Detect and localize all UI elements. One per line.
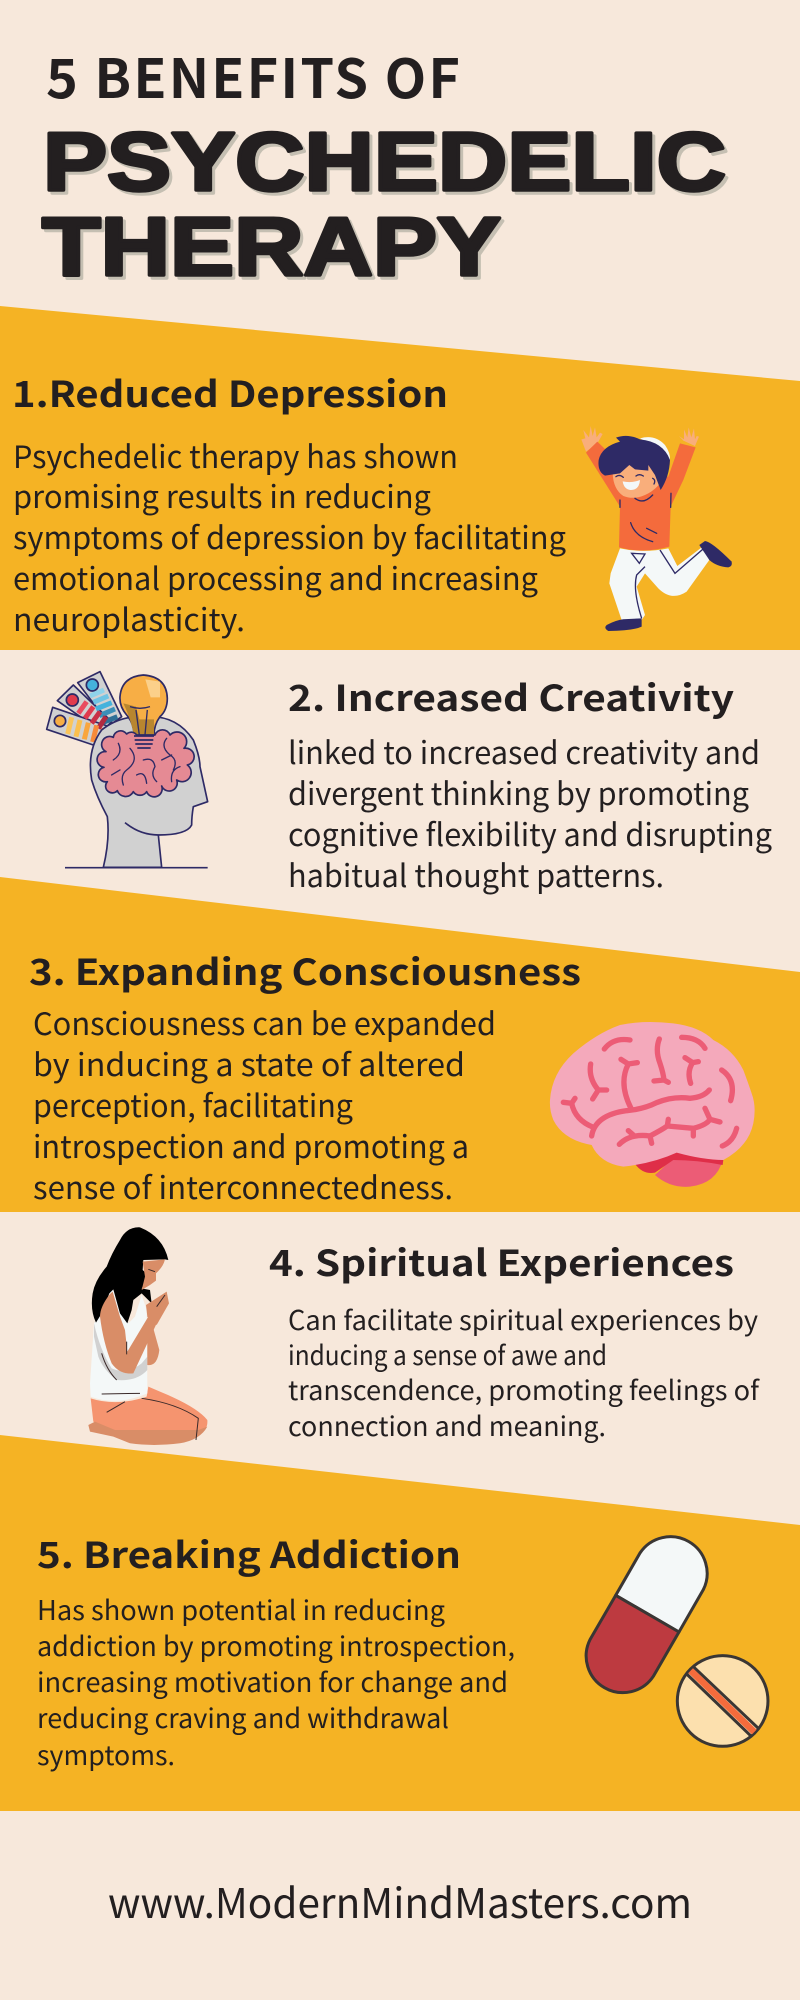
body text: expanding consciousness: Consciousness can be expanded [33,999,496,1044]
heading: increased creativity: 2. Increased Creativity [288,670,734,722]
body text: expanding consciousness [33,999,496,1208]
body text: spiritual experiences: transcendence, promoting feelings of [288,1369,760,1408]
body text: reduced depression: Psychedelic therapy has shown [13,432,458,477]
body text: increased creativity: habitual thought patterns. [288,851,664,896]
panel: expanding consciousness [0,877,800,1212]
body text: expanding consciousness: perception, facilitating [33,1081,354,1126]
body text: spiritual experiences: connection and meaning. [288,1405,606,1444]
panel: increased creativity [47,670,772,896]
title word: psychedelic: PSYCHEDELIC [43,115,726,208]
title word: therapy: THERAPY [45,203,504,296]
body text: increased creativity: linked to increased creativity and [288,728,760,773]
body text: increased creativity: cognitive flexibility and disrupting [288,810,772,855]
panel: reduced depression [0,306,800,650]
body text: reduced depression: emotional processing and increasing [13,554,539,599]
body text: increased creativity [288,728,772,896]
heading: breaking addiction: 5. Breaking Addiction [37,1527,461,1579]
panel: spiritual experiences [88,1227,760,1445]
body text: spiritual experiences [288,1299,760,1444]
body text: breaking addiction [37,1589,515,1773]
icon: brain [550,1022,755,1187]
body text: reduced depression: symptoms of depression by facilitating [13,513,566,558]
body text: expanding consciousness: by inducing a state of altered [33,1040,465,1085]
body text: increased creativity: divergent thinking by promoting [288,769,749,814]
body text: reduced depression [13,432,566,640]
body text: breaking addiction: addiction by promoting introspection, [37,1625,515,1664]
icon: praying woman [88,1227,207,1445]
title block [42,35,729,296]
body text: expanding consciousness: sense of interconnectedness. [33,1163,453,1208]
panel: breaking addiction [0,1435,800,1811]
heading: reduced depression: 1.Reduced Depression [12,366,448,418]
body text: breaking addiction: Has shown potential in reducing [37,1589,445,1628]
body text: breaking addiction: reducing craving and withdrawal [37,1697,449,1736]
body text: breaking addiction: symptoms. [37,1734,175,1773]
body text: spiritual experiences: inducing a sense of awe and [288,1334,607,1373]
title line: 5 benefits of: 5 BENEFITS OF [46,35,460,114]
body text: reduced depression: neuroplasticity. [13,595,245,640]
icon: head with brain, bulb and colour swatches [47,672,208,868]
icon: jumping boy [581,426,732,631]
body text: reduced depression: promising results in reducing [13,472,432,517]
footer: website address: www.ModernMindMasters.com [108,1870,692,1930]
icon: capsule and tablet [586,1537,768,1746]
heading: spiritual experiences: 4. Spiritual Experiences [269,1235,734,1287]
title word: psychedelic: PSYCHEDELIC [46,118,729,211]
body text: breaking addiction: increasing motivation for change and [37,1661,508,1700]
heading: expanding consciousness: 3. Expanding Consciousness [29,944,581,996]
body text: expanding consciousness: introspection and promoting a [33,1122,469,1167]
body text: spiritual experiences: Can facilitate spiritual experiences by [288,1299,758,1338]
title word: therapy: THERAPY [42,200,501,293]
